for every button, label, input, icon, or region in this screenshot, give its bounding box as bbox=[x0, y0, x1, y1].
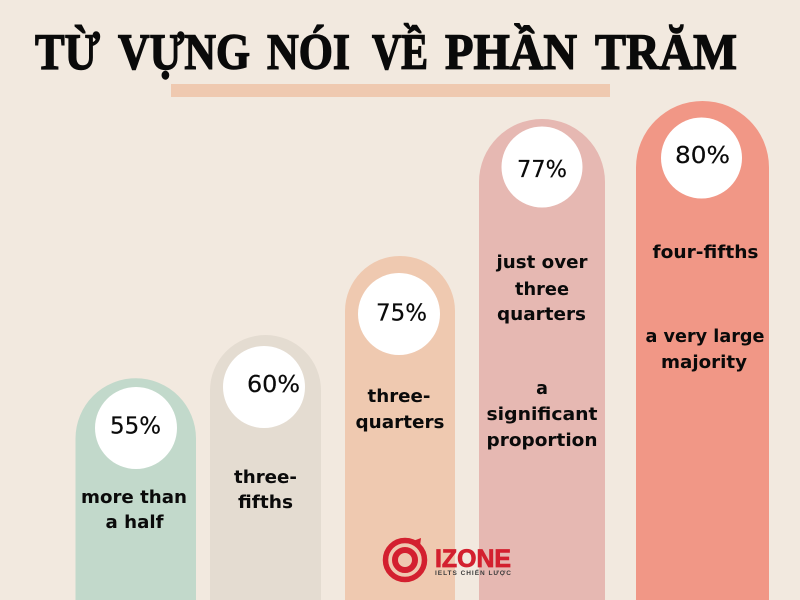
title: VỀ bbox=[372, 23, 428, 81]
column: 55%: a half bbox=[106, 513, 164, 533]
column: 77%: just over bbox=[495, 253, 588, 273]
column: 60%: three- bbox=[234, 468, 297, 488]
column: 55%: 55% bbox=[110, 414, 161, 440]
logo: IZONE bbox=[386, 538, 511, 580]
column: 55% bbox=[76, 378, 196, 600]
column: 60% bbox=[210, 335, 321, 600]
column: 77% bbox=[479, 119, 605, 600]
column: 80%: a very large bbox=[646, 327, 765, 347]
column: 77%: 77% bbox=[517, 157, 567, 183]
title underline bar bbox=[171, 84, 610, 97]
logo: IZONE: IZONE bbox=[435, 545, 511, 573]
column: 75%: 75% bbox=[376, 300, 427, 326]
column: 77%: quarters bbox=[497, 305, 586, 325]
title: TRĂM bbox=[595, 25, 737, 81]
column: 77%: significant bbox=[486, 405, 598, 425]
column: 80%: majority bbox=[661, 353, 748, 373]
column: 77%: a bbox=[536, 379, 548, 399]
column: 60%: 60% bbox=[247, 372, 300, 398]
column: 60%: fifths bbox=[238, 493, 293, 513]
column: 55%: more than bbox=[81, 488, 187, 508]
title: TỪ bbox=[35, 25, 100, 81]
column: 75% bbox=[345, 256, 455, 600]
title: NÓI bbox=[267, 25, 350, 81]
title: PHẦN bbox=[445, 23, 577, 81]
column: 80%: 80% bbox=[675, 143, 730, 169]
column: 75%: quarters bbox=[356, 413, 444, 433]
column: 77%: proportion bbox=[486, 431, 598, 451]
column: 77%: three bbox=[515, 280, 569, 300]
title bbox=[35, 23, 737, 81]
logo: IZONE: IELTS CHIẾN LƯỢC bbox=[435, 567, 511, 577]
column: 80% bbox=[636, 101, 769, 600]
column: 80%: four-fifths bbox=[652, 243, 758, 263]
column: 75%: three- bbox=[368, 387, 430, 407]
title: VỰNG bbox=[118, 25, 250, 81]
